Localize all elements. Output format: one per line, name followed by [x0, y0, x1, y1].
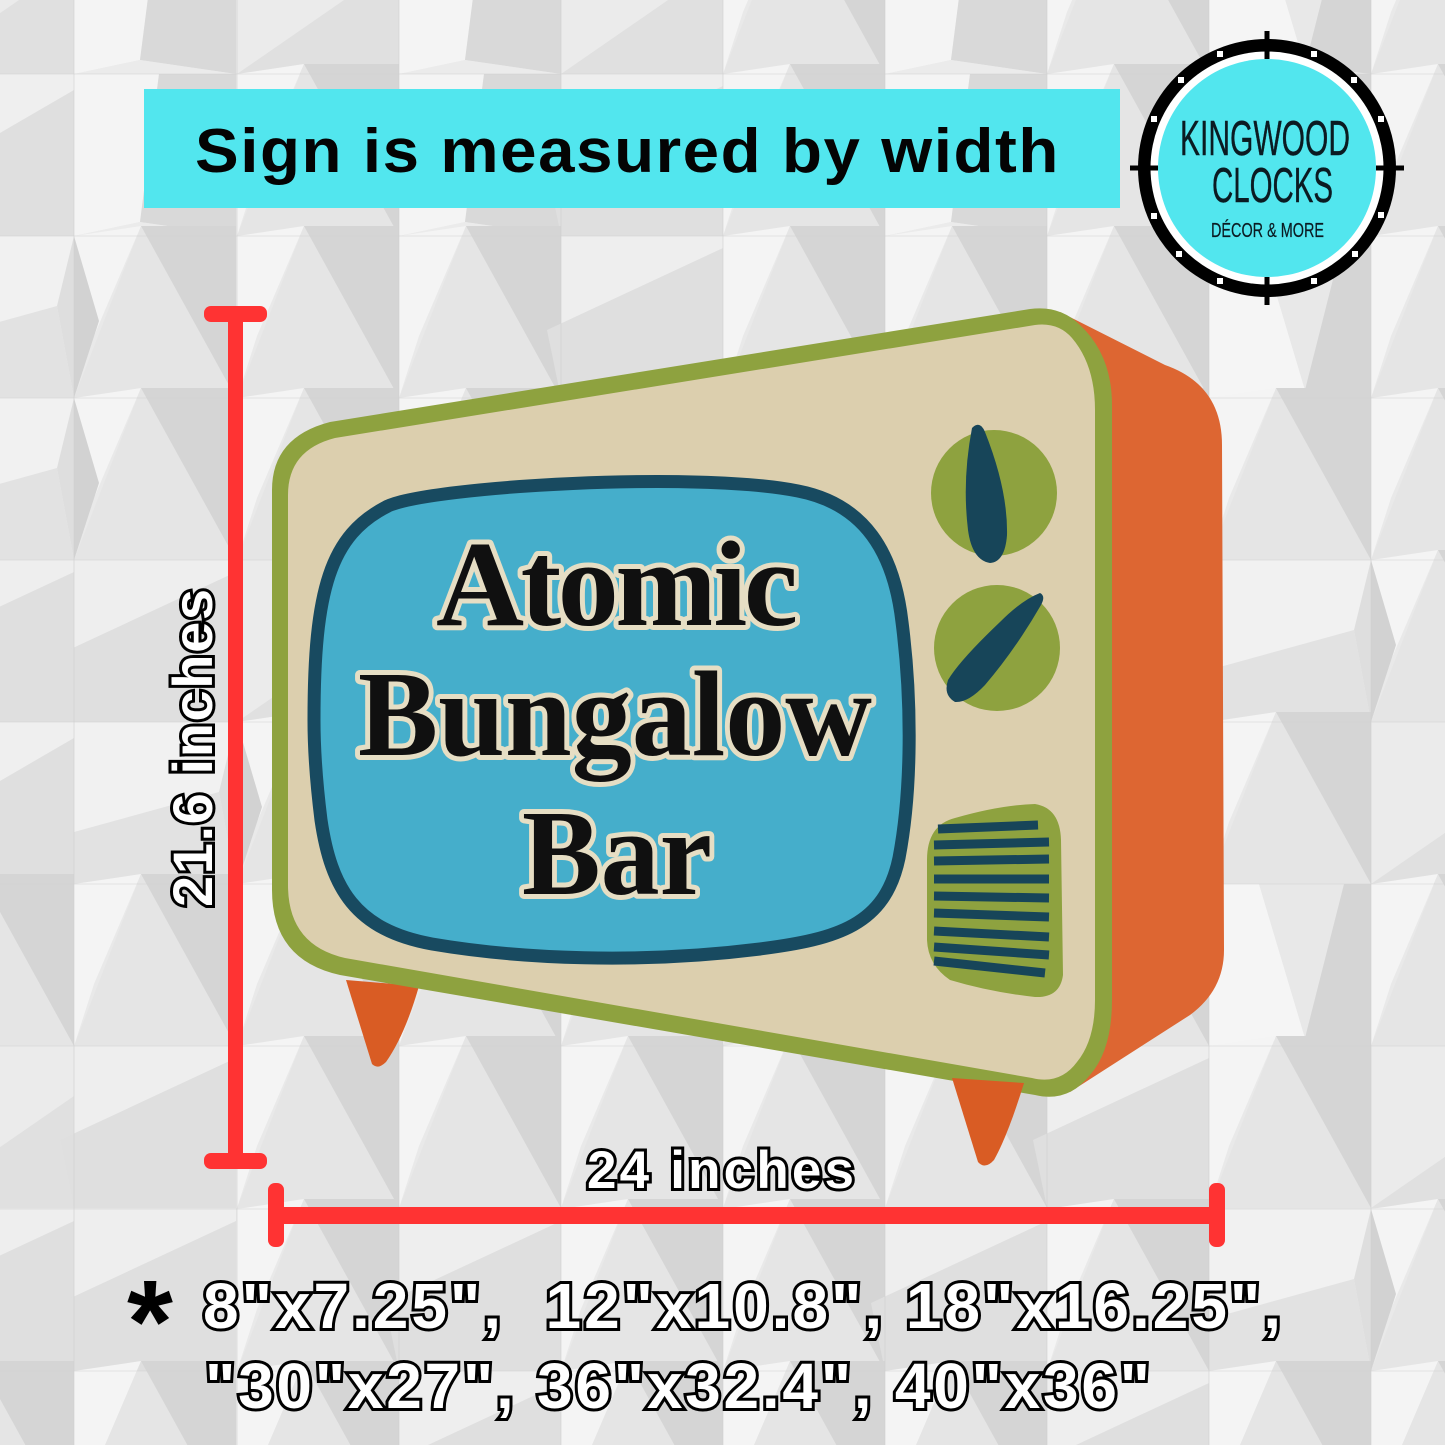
vertical dimension line	[204, 306, 267, 1169]
asterisk bullet: *	[127, 1256, 173, 1388]
knob 2	[934, 585, 1060, 711]
TV green frame	[272, 308, 1112, 1097]
TV right foot	[952, 1078, 1024, 1166]
speaker grille	[927, 804, 1063, 997]
logo wordmark second line: CLOCKS	[1212, 159, 1333, 213]
TV screen	[314, 482, 909, 958]
vertical dimension label: 21.6 inches	[161, 589, 224, 907]
knob 1	[931, 425, 1057, 563]
sign text: Atomic: Atomic	[436, 517, 798, 652]
sign text: Bungalow: Bungalow	[358, 647, 872, 782]
logo: KingWood Clocks badge	[1130, 31, 1404, 305]
sizes list line 1: 8"x7.25", 12"x10.8", 18"x16.25",	[203, 1270, 1281, 1342]
logo tagline: DÉCOR & MORE	[1211, 219, 1324, 242]
TV cream front	[288, 325, 1095, 1080]
TV side panel	[1060, 312, 1224, 1092]
heading text: Sign is measured by width	[195, 117, 1060, 186]
sign text: Bar: Bar	[522, 786, 712, 921]
sizes list line 2: "30"x27", 36"x32.4", 40"x36"	[205, 1350, 1150, 1422]
horizontal dimension label: 24 inches	[587, 1141, 854, 1200]
horizontal dimension line	[268, 1183, 1225, 1247]
heading banner	[144, 89, 1120, 208]
TV left foot	[346, 980, 419, 1067]
TV sign illustration	[272, 308, 1224, 1166]
